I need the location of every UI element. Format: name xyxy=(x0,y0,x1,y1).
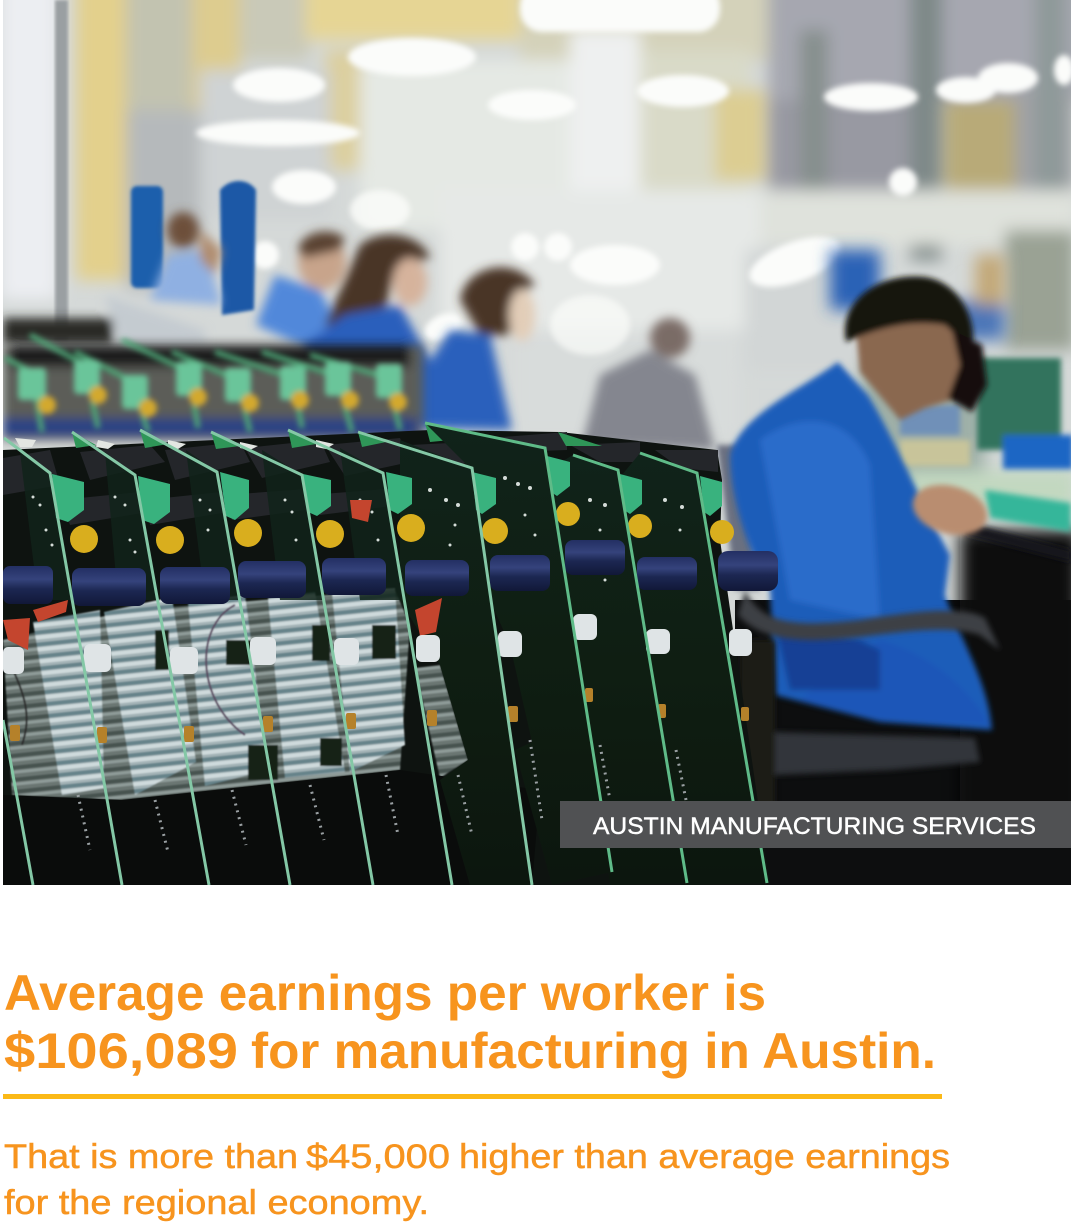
green board faces xyxy=(11,424,742,802)
supporting text: That is more than xyxy=(4,1138,298,1176)
right foreground worker xyxy=(717,250,1071,830)
ceiling lights xyxy=(196,0,1071,355)
springs xyxy=(78,740,686,852)
headline: for manufacturing in Austin. xyxy=(251,1023,936,1079)
supporting text: higher than average earnings xyxy=(459,1138,950,1176)
red wires xyxy=(3,500,442,650)
blue cylinders xyxy=(3,540,778,606)
solder dots xyxy=(32,476,684,586)
headline xyxy=(4,965,936,1079)
blue stacks xyxy=(131,181,256,315)
chair xyxy=(738,590,1000,810)
caption bar xyxy=(560,801,1071,848)
caption bar: AUSTIN MANUFACTURING SERVICES xyxy=(593,813,1036,840)
divider rule xyxy=(3,1094,942,1099)
supporting text: for the regional economy. xyxy=(4,1184,429,1222)
white stickers xyxy=(15,438,334,450)
front row base: dark circuitry xyxy=(3,423,770,885)
light green board edges xyxy=(3,423,767,885)
small amber coils xyxy=(10,688,749,743)
bright green rear board tops xyxy=(72,423,602,449)
yellow capacitors xyxy=(70,502,734,554)
black heat sink bars along the top xyxy=(3,432,718,525)
blurred factory background xyxy=(0,0,1071,890)
white standoffs xyxy=(3,614,752,674)
green connectors xyxy=(52,456,722,524)
hands xyxy=(908,482,990,538)
supporting text xyxy=(4,1138,950,1222)
supporting text: $45,000 xyxy=(306,1138,450,1176)
dark notches xyxy=(155,625,396,780)
photo: electronics assembly line xyxy=(0,0,1071,890)
silver heat sinks xyxy=(3,588,468,800)
headline: Average earnings per worker is xyxy=(4,965,766,1021)
dark floor behind the chair xyxy=(735,600,1071,890)
background workers xyxy=(3,181,715,450)
face and hair xyxy=(845,276,987,420)
blue jacket xyxy=(730,362,992,730)
headline: $106,089 xyxy=(4,1023,238,1079)
thin pole xyxy=(55,0,68,340)
rear row of circuit boards xyxy=(3,335,423,440)
